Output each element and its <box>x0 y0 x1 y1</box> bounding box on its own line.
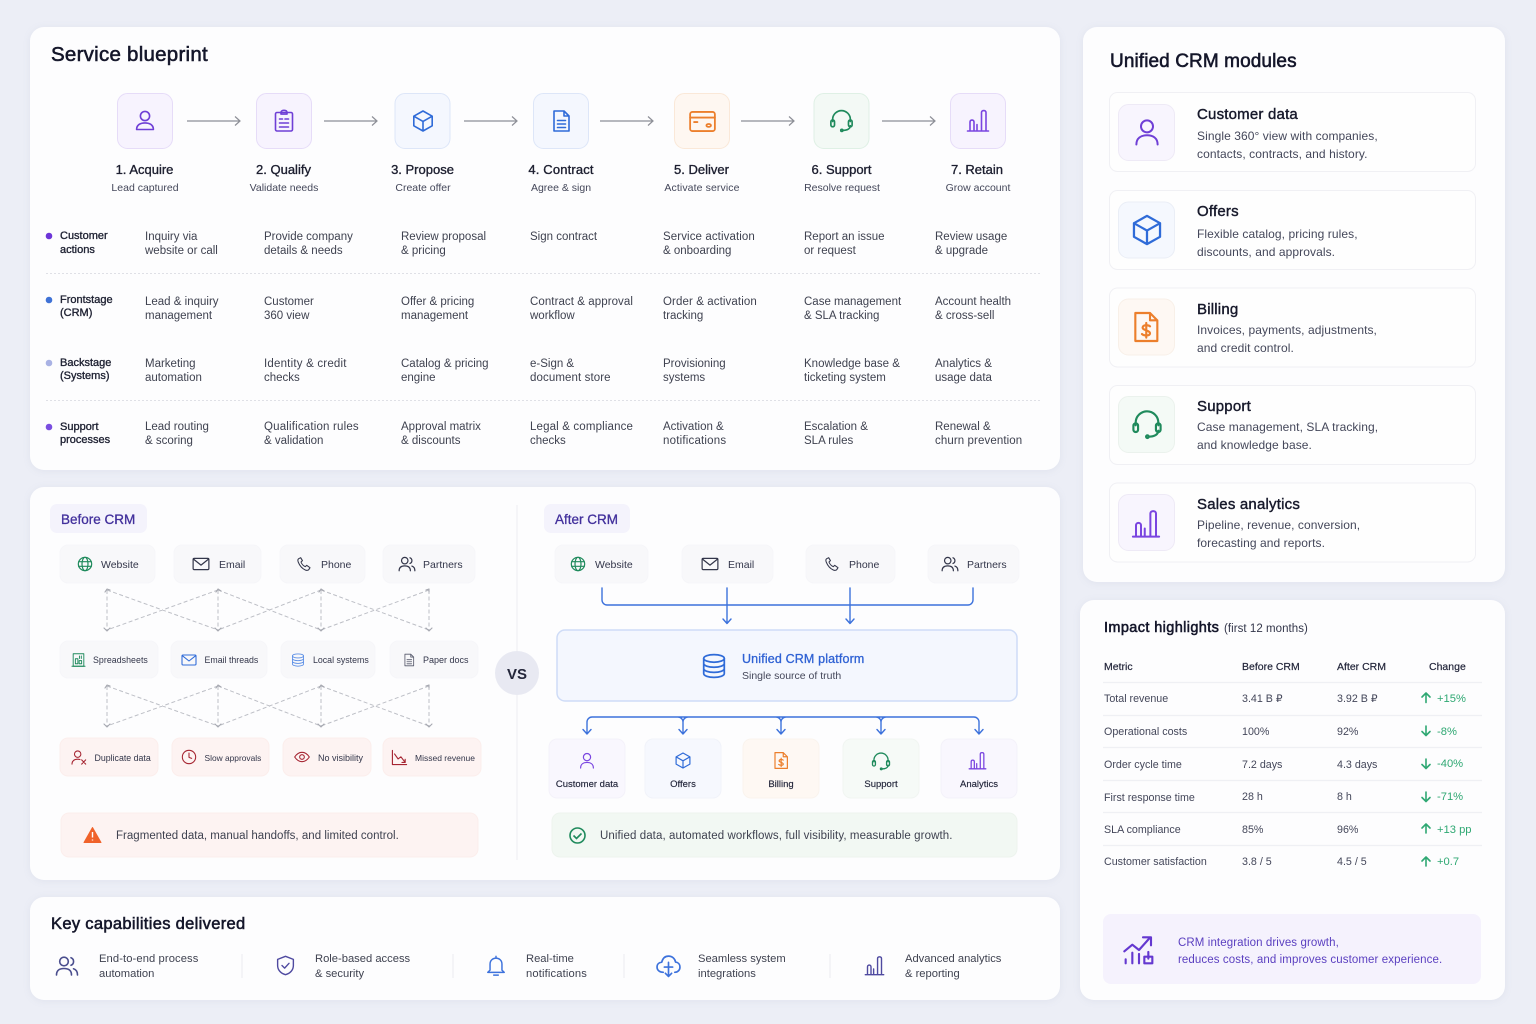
impact table: 96% <box>1337 824 1359 836</box>
arrow: acquire to qualify <box>187 116 240 126</box>
module: sales analytics <box>1110 483 1476 562</box>
step 4: contract: Agree & sign <box>531 182 591 194</box>
row: backstage: Provisioning <box>663 358 726 370</box>
before: channel chips <box>60 545 475 583</box>
impact table: +0.7 <box>1437 856 1459 868</box>
after: success summary: Unified data, automated workflows, full visibility, measurable growth. <box>600 830 953 842</box>
capability: automation: automation <box>99 968 154 980</box>
module: billing: Invoices, payments, adjustments, <box>1197 323 1377 337</box>
row: support processes: Escalation & <box>804 421 868 433</box>
row: frontstage: management <box>145 310 213 322</box>
arrow: contract to deliver <box>600 116 653 126</box>
row: frontstage: management <box>401 310 469 322</box>
row: backstage: systems <box>663 372 705 384</box>
row: customer actions: Inquiry via <box>145 231 198 243</box>
step 2: qualify <box>250 94 318 194</box>
arrow: support to retain <box>882 116 935 126</box>
panel: unified CRM modules <box>1083 27 1505 582</box>
step 2: qualify: 2. Qualify <box>256 162 311 177</box>
step 5: deliver: Activate service <box>664 182 740 194</box>
row: customer actions: Sign contract <box>530 231 598 243</box>
impact table: +13 pp <box>1437 824 1472 836</box>
arrow: propose to contract <box>464 116 517 126</box>
row: support processes <box>46 421 1022 447</box>
before: warning summary: Fragmented data, manual handoffs, and limited control. <box>116 830 399 842</box>
row: support processes: checks <box>530 435 566 447</box>
impact table: 100% <box>1242 726 1270 738</box>
module: support: Case management, SLA tracking, <box>1197 420 1378 434</box>
module: billing: and credit control. <box>1197 341 1294 355</box>
impact table: -8% <box>1437 726 1457 738</box>
badge: before CRM: Before CRM <box>61 512 135 527</box>
panel: before and after comparison <box>30 487 1060 880</box>
before: warning summary <box>61 813 478 857</box>
row: frontstage: Order & activation <box>663 296 757 308</box>
impact table <box>1103 661 1482 868</box>
before: channel chips: Phone <box>321 559 352 571</box>
capability: integrations: integrations <box>698 968 756 980</box>
row: support processes: Support <box>60 421 99 433</box>
row: support processes: SLA rules <box>804 435 853 447</box>
capability: integrations: Seamless system <box>698 953 786 965</box>
row: backstage: Knowledge base & <box>804 358 900 370</box>
impact table: First response time <box>1104 792 1195 804</box>
step 1: acquire <box>111 94 179 194</box>
capability: access and security: & security <box>315 968 365 980</box>
impact table: 85% <box>1242 824 1264 836</box>
row: customer actions: & onboarding <box>663 245 731 257</box>
callout: growth summary: CRM integration drives growth, <box>1178 937 1339 949</box>
heading: impact highlights <box>1104 620 1308 636</box>
row: customer actions <box>46 230 1007 257</box>
impact table: Customer satisfaction <box>1104 856 1207 868</box>
after: channel chips: Email <box>728 559 754 571</box>
after: unified CRM platform: Unified CRM platform <box>742 652 864 666</box>
capability: notifications: notifications <box>526 968 587 980</box>
row: frontstage: 360 view <box>264 310 310 322</box>
step 3: propose: 3. Propose <box>391 162 454 177</box>
impact table: Metric <box>1104 661 1133 673</box>
impact table: Change <box>1429 661 1466 673</box>
row: frontstage: & SLA tracking <box>804 310 879 322</box>
impact table: After CRM <box>1337 661 1386 673</box>
row: customer actions: actions <box>60 244 95 256</box>
row: customer actions: website or call <box>144 245 218 257</box>
row: backstage: Identity & credit <box>264 358 347 370</box>
heading: key capabilities: Key capabilities delivered <box>51 915 246 933</box>
arrow: deliver to support <box>741 116 794 126</box>
arrow: qualify to propose <box>324 116 377 126</box>
panel: key capabilities <box>30 897 1060 1000</box>
module: sales analytics: Sales analytics <box>1197 496 1300 513</box>
row: customer actions: Review usage <box>935 231 1007 243</box>
capability: analytics: Advanced analytics <box>905 953 1002 965</box>
after: platform to modules connectors <box>583 717 983 734</box>
before: tangled connectors top <box>104 589 432 631</box>
row: backstage: Backstage <box>60 357 111 369</box>
after: success summary <box>552 813 1017 857</box>
module: sales analytics: forecasting and reports. <box>1197 536 1325 550</box>
row: frontstage: Customer <box>264 296 314 308</box>
step 1: acquire: Lead captured <box>111 182 179 194</box>
after: module cards: Analytics <box>960 779 998 790</box>
step 7: retain <box>946 94 1010 194</box>
panel: service blueprint <box>30 27 1060 470</box>
impact table: 4.5 / 5 <box>1337 856 1367 868</box>
module: billing <box>1110 288 1476 367</box>
row: backstage: automation <box>145 372 202 384</box>
heading: impact highlights: (first 12 months) <box>1224 623 1308 635</box>
module: customer data <box>1110 92 1476 172</box>
after: unified CRM platform <box>557 630 1017 701</box>
impact table: -71% <box>1437 791 1463 803</box>
panel: impact highlights <box>1080 600 1505 1000</box>
row: support processes: Renewal & <box>935 421 991 433</box>
badge: after CRM <box>544 504 630 533</box>
before: system chips: Local systems <box>313 655 369 665</box>
row: frontstage: workflow <box>529 310 575 322</box>
after: channel chips: Partners <box>967 559 1007 571</box>
step 5: deliver <box>664 94 740 194</box>
module: customer data: contacts, contracts, and history. <box>1197 147 1368 161</box>
row: support processes: & discounts <box>401 435 461 447</box>
step 2: qualify: Validate needs <box>250 182 318 194</box>
row: backstage <box>46 357 993 384</box>
impact table: 3.8 / 5 <box>1242 856 1272 868</box>
capability: analytics: & reporting <box>905 968 960 980</box>
row: backstage: checks <box>264 372 300 384</box>
row: customer actions: Provide company <box>264 231 353 243</box>
before: channel chips: Email <box>219 559 245 571</box>
impact table: 7.2 days <box>1242 759 1282 771</box>
step 6: support: Resolve request <box>804 182 880 194</box>
heading: unified CRM modules: Unified CRM modules <box>1110 51 1297 72</box>
badge: after CRM: After CRM <box>555 512 618 527</box>
after: channel chips <box>555 545 1019 583</box>
module: support: and knowledge base. <box>1197 438 1312 452</box>
row: backstage: document store <box>530 372 611 384</box>
row: backstage: engine <box>401 372 436 384</box>
row: backstage: (Systems) <box>60 370 110 382</box>
before: system chips: Spreadsheets <box>93 655 148 665</box>
row: support processes: churn prevention <box>935 435 1022 447</box>
impact table: Total revenue <box>1104 693 1168 705</box>
impact table: 3.92 B ₽ <box>1337 693 1378 705</box>
before: system chips: Paper docs <box>423 655 469 665</box>
module: sales analytics: Pipeline, revenue, conversion, <box>1197 518 1360 532</box>
before: channel chips: Partners <box>423 559 463 571</box>
capability: notifications <box>488 953 587 980</box>
row: support processes: Legal & compliance <box>530 421 633 433</box>
before: problem chips: Slow approvals <box>204 753 261 763</box>
module: offers <box>1110 190 1476 270</box>
impact table: +15% <box>1437 693 1466 705</box>
row: frontstage: tracking <box>663 310 703 322</box>
row: frontstage: Account health <box>935 296 1011 308</box>
row: frontstage: Offer & pricing <box>401 296 474 308</box>
row: backstage: Analytics & <box>935 358 992 370</box>
row: support processes: Qualification rules <box>264 421 359 433</box>
row: frontstage: (CRM) <box>60 307 92 319</box>
capability: analytics <box>865 953 1002 980</box>
impact table: Before CRM <box>1242 661 1300 673</box>
row: customer actions: Service activation <box>663 231 755 243</box>
step 3: propose: Create offer <box>395 182 451 194</box>
impact table: 8 h <box>1337 791 1352 803</box>
before: system chips: Email threads <box>204 655 259 665</box>
module: customer data: Customer data <box>1197 106 1298 123</box>
impact table: Operational costs <box>1104 726 1187 738</box>
step 1: acquire: 1. Acquire <box>116 162 173 177</box>
row: backstage: Marketing <box>145 358 196 370</box>
module: billing: Billing <box>1197 301 1238 318</box>
step 6: support: 6. Support <box>812 162 872 177</box>
after: module cards: Offers <box>670 779 696 790</box>
heading: impact highlights: Impact highlights <box>1104 620 1219 636</box>
row: support processes: & validation <box>264 435 323 447</box>
step 4: contract: 4. Contract <box>528 162 594 177</box>
impact table: Order cycle time <box>1104 759 1182 771</box>
row: frontstage: Contract & approval <box>530 296 633 308</box>
row: support processes: notifications <box>663 435 726 447</box>
row: frontstage: Frontstage <box>60 294 113 306</box>
module: support: Support <box>1197 398 1252 415</box>
capability: access and security: Role-based access <box>315 953 411 965</box>
capability: automation <box>56 953 199 980</box>
row: customer actions: Customer <box>60 230 108 242</box>
before: problem chips: No visibility <box>318 753 364 763</box>
module: offers: Flexible catalog, pricing rules, <box>1197 227 1358 241</box>
row: customer actions: & upgrade <box>935 245 988 257</box>
row: customer actions: Report an issue <box>804 231 885 243</box>
row: support processes: Lead routing <box>145 421 209 433</box>
after: channel chips: Phone <box>849 559 880 571</box>
VS badge <box>495 651 539 695</box>
badge: before CRM <box>50 504 147 533</box>
after: channels into platform connectors <box>602 588 973 624</box>
row: customer actions: & pricing <box>401 245 446 257</box>
row: backstage: Catalog & pricing <box>401 358 489 370</box>
before: tangled connectors bottom <box>104 685 432 727</box>
module: offers: Offers <box>1197 203 1239 220</box>
before: problem chips: Duplicate data <box>94 753 151 763</box>
impact table: -40% <box>1437 758 1463 770</box>
row: customer actions: or request <box>804 245 857 257</box>
row: frontstage: Lead & inquiry <box>145 296 219 308</box>
row: backstage: usage data <box>935 372 993 384</box>
impact table: 3.41 B ₽ <box>1242 693 1283 705</box>
before: problem chips: Missed revenue <box>415 753 475 763</box>
row: backstage: ticketing system <box>804 372 886 384</box>
row: frontstage: Case management <box>804 296 902 308</box>
callout: growth summary: reduces costs, and improves customer experience. <box>1178 954 1442 966</box>
row: frontstage <box>46 294 1011 322</box>
step 4: contract <box>528 94 594 194</box>
after: unified CRM platform: Single source of truth <box>742 670 841 682</box>
impact table: SLA compliance <box>1104 824 1181 836</box>
step 7: retain: 7. Retain <box>951 162 1003 177</box>
step 7: retain: Grow account <box>946 182 1010 194</box>
impact table: 28 h <box>1242 791 1263 803</box>
VS badge: VS <box>507 666 527 683</box>
before: problem chips <box>60 738 481 776</box>
heading: service blueprint: Service blueprint <box>51 43 208 66</box>
impact table: 4.3 days <box>1337 759 1377 771</box>
row: support processes: & scoring <box>145 435 193 447</box>
module: offers: discounts, and approvals. <box>1197 245 1335 259</box>
row: customer actions: details & needs <box>264 245 343 257</box>
row: support processes: Activation & <box>663 421 724 433</box>
row: frontstage: & cross-sell <box>935 310 994 322</box>
row: backstage: e-Sign & <box>530 358 574 370</box>
after: module cards: Billing <box>768 779 794 790</box>
after: module cards: Support <box>864 779 898 790</box>
after: module cards: Customer data <box>556 779 619 790</box>
after: channel chips: Website <box>595 559 633 571</box>
capability: access and security <box>278 953 411 980</box>
row: support processes: processes <box>60 434 111 446</box>
row: support processes: Approval matrix <box>401 421 481 433</box>
module: customer data: Single 360° view with companies, <box>1197 129 1378 143</box>
capability: integrations <box>657 953 786 980</box>
after: module cards <box>549 739 1017 798</box>
step 5: deliver: 5. Deliver <box>674 162 730 177</box>
step 6: support <box>804 94 880 194</box>
row: customer actions: Review proposal <box>401 231 486 243</box>
module: support <box>1110 386 1476 464</box>
before: system chips <box>60 641 478 678</box>
impact table: 92% <box>1337 726 1359 738</box>
step 3: propose <box>391 94 454 194</box>
capability: notifications: Real-time <box>526 953 574 965</box>
callout: growth summary <box>1103 914 1481 984</box>
before: channel chips: Website <box>101 559 139 571</box>
capability: automation: End-to-end process <box>99 953 199 965</box>
